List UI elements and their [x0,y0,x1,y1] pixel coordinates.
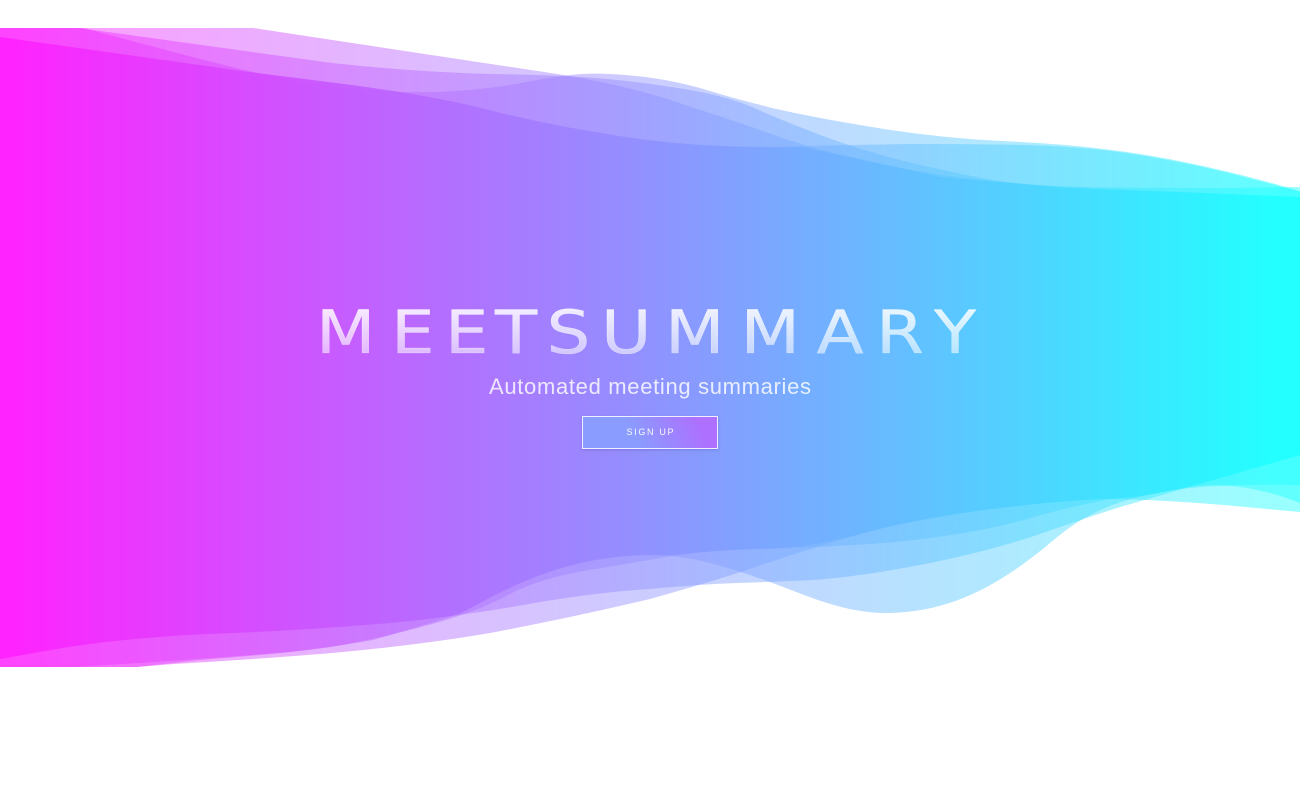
upper wave layers [0,28,1300,350]
title: MEETSUMMARY [316,298,977,368]
button: sign up [582,416,718,448]
button: sign up: SIGN UP [626,427,674,437]
lower wave layers [0,350,1300,667]
solid gradient core [0,37,1300,659]
subtitle: Automated meeting summaries [489,374,811,399]
